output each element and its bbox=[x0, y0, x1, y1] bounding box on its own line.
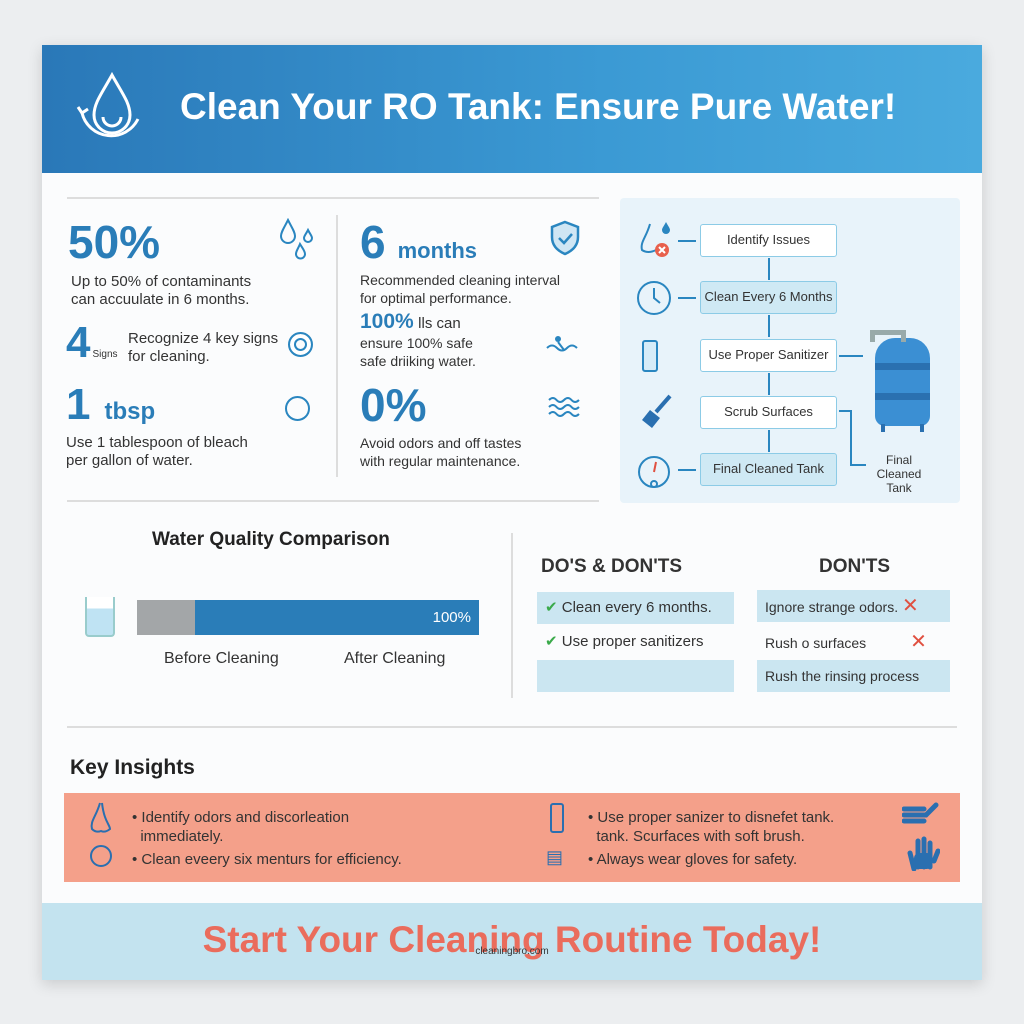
panel: key insights: • Use proper sanizer to disnefet tank. bbox=[588, 809, 834, 826]
stat: 0%: Avoid odors and off tastes bbox=[360, 435, 521, 451]
panel: key insights: ▤ bbox=[546, 847, 563, 867]
stat: 4 signs: for cleaning. bbox=[128, 348, 210, 365]
icon: glass bbox=[85, 597, 115, 637]
panel: dos bbox=[537, 556, 734, 692]
panel: flowchart: Use Proper Sanitizer bbox=[709, 347, 828, 362]
icon: ring bbox=[288, 332, 313, 357]
stat: 0%: 0% bbox=[360, 379, 426, 431]
stat: 6 months: 6 months bbox=[360, 216, 477, 268]
panel: donts: DON'TS bbox=[819, 556, 890, 577]
stat: 50%: can accuulate in 6 months. bbox=[71, 291, 249, 308]
panel: dos: ✔ Clean every 6 months. bbox=[545, 599, 712, 616]
stat: 4 signs bbox=[66, 318, 278, 367]
panel: flowchart: Clean Every 6 Months bbox=[705, 289, 832, 304]
step boxes bbox=[700, 224, 837, 257]
step boxes: Identify Issues bbox=[727, 232, 810, 247]
stat: 50% bbox=[68, 216, 251, 308]
panel: key insights bbox=[64, 793, 960, 882]
stat: 100%: ensure 100% safe bbox=[360, 335, 473, 351]
bar chart: 100% bbox=[433, 609, 471, 626]
final label: Final bbox=[886, 453, 912, 467]
heading: water quality: Water Quality Comparison bbox=[152, 529, 390, 550]
header banner bbox=[42, 45, 982, 173]
stat: 50%: 50% bbox=[68, 216, 160, 268]
panel: donts: Rush the rinsing process bbox=[765, 668, 919, 684]
panel: flowchart: Final Cleaned Tank bbox=[713, 461, 824, 476]
stat: 6 months: Recommended cleaning interval bbox=[360, 272, 560, 288]
final label: Cleaned bbox=[877, 467, 921, 481]
stat: 100%: 100% lls can bbox=[360, 310, 461, 333]
final label bbox=[877, 453, 921, 495]
panel: donts: Rush o surfaces ✕ bbox=[765, 631, 927, 653]
panel: key insights: immediately. bbox=[140, 828, 223, 845]
stat: 100% bbox=[360, 310, 476, 369]
stat: 6 months bbox=[360, 216, 560, 306]
panel: flowchart bbox=[620, 198, 960, 503]
final label: Tank bbox=[886, 481, 912, 495]
stat: 4 signs: 4Signs bbox=[66, 318, 118, 367]
panel: dos: DO'S & DON'TS bbox=[541, 556, 682, 577]
heading: key insights: Key Insights bbox=[70, 756, 195, 779]
stat: 100%: safe driiking water. bbox=[360, 353, 476, 369]
panel: dos: ✔ Use proper sanitizers bbox=[545, 633, 703, 650]
text: After Cleaning bbox=[344, 650, 445, 667]
panel: key insights: • Clean eveery six menturs for efficiency. bbox=[132, 851, 402, 868]
icon: tank bbox=[875, 338, 930, 426]
panel: key insights: • Always wear gloves for safety. bbox=[588, 851, 797, 868]
stat: 4 signs: Recognize 4 key signs bbox=[128, 330, 278, 347]
stat: 1 tbsp: 1 tbsp bbox=[66, 380, 155, 429]
stat: 6 months: for optimal performance. bbox=[360, 290, 512, 306]
icon: waves bbox=[548, 397, 580, 417]
panel: key insights: • Identify odors and discorleation bbox=[132, 809, 349, 826]
footer banner: cleaningbro.com bbox=[475, 946, 549, 957]
text: Before Cleaning bbox=[164, 650, 279, 667]
call to action: Start Your Cleaning Routine Today! bbox=[203, 919, 821, 960]
panel: donts: Ignore strange odors. ✕ bbox=[765, 595, 919, 617]
title: Clean Your RO Tank: Ensure Pure Water! bbox=[180, 86, 896, 127]
stat: 50%: Up to 50% of contaminants bbox=[71, 273, 251, 290]
icons left bbox=[640, 222, 670, 257]
stat: 0% bbox=[360, 379, 521, 469]
stat: 1 tbsp: per gallon of water. bbox=[66, 452, 193, 469]
panel: key insights: tank. Scurfaces with soft brush. bbox=[596, 828, 805, 845]
panel: flowchart: Scrub Surfaces bbox=[724, 404, 813, 419]
icon: drops bbox=[280, 218, 313, 260]
icon: cycle bbox=[285, 396, 310, 421]
stat: 1 tbsp bbox=[66, 380, 248, 469]
panel: donts bbox=[757, 556, 950, 692]
icon: swimmer bbox=[546, 336, 578, 352]
bar chart bbox=[137, 600, 479, 635]
stat: 0%: with regular maintenance. bbox=[360, 453, 520, 469]
stat: 1 tbsp: Use 1 tablespoon of bleach bbox=[66, 434, 248, 451]
footer banner bbox=[42, 903, 982, 980]
icon: water drop bbox=[76, 72, 140, 138]
icon: shield bbox=[550, 220, 580, 256]
